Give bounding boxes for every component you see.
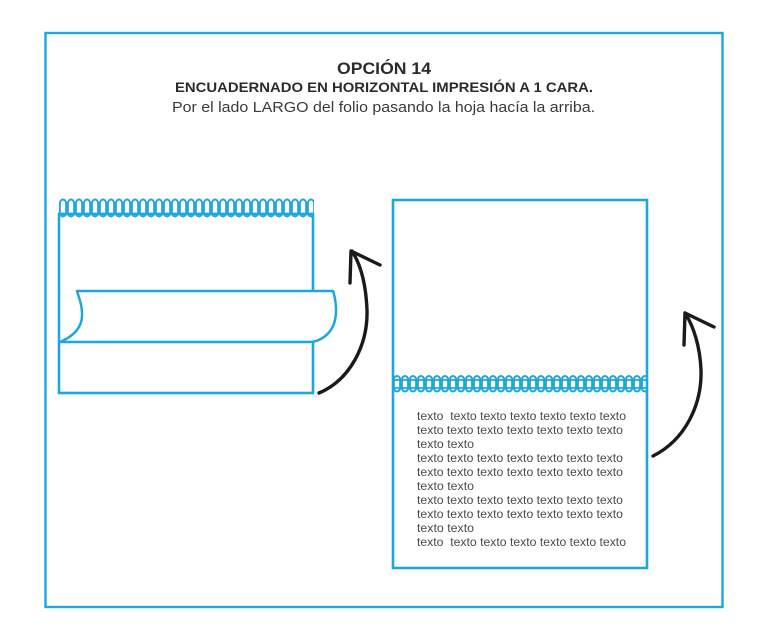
page text: texto texto texto texto texto texto texto bbox=[417, 452, 623, 465]
right notebook bbox=[392, 200, 648, 568]
turning page curl bbox=[60, 291, 336, 342]
subtitle: ENCUADERNADO EN HORIZONTAL IMPRESIÓN A 1 CARA. bbox=[175, 78, 593, 95]
title: OPCIÓN 14 bbox=[337, 59, 432, 78]
arrow: right page flip bbox=[653, 313, 714, 456]
arrow: left page flip bbox=[319, 251, 380, 393]
heading block bbox=[172, 59, 595, 116]
page text: texto texto texto texto texto texto texto bbox=[417, 410, 626, 423]
page text: texto texto texto texto texto texto texto bbox=[417, 494, 623, 507]
description: Por el lado LARGO del folio pasando la hoja hacía la arriba. bbox=[172, 100, 595, 116]
page text: texto texto bbox=[417, 438, 474, 451]
left spiral binding bbox=[58, 197, 314, 219]
page text: texto texto texto texto texto texto texto bbox=[417, 424, 623, 437]
page text: texto texto bbox=[417, 480, 474, 493]
page text: texto texto texto texto texto texto texto bbox=[417, 466, 623, 479]
outer frame bbox=[46, 33, 722, 607]
page text: texto texto texto texto texto texto texto bbox=[417, 536, 626, 549]
middle spiral binding bbox=[392, 374, 648, 394]
right notebook page bbox=[393, 200, 647, 568]
left notebook bbox=[58, 197, 336, 393]
left notebook page bbox=[59, 214, 313, 393]
page text: texto texto bbox=[417, 522, 474, 535]
page text: texto texto texto texto texto texto texto bbox=[417, 508, 623, 521]
page text bbox=[417, 410, 626, 549]
